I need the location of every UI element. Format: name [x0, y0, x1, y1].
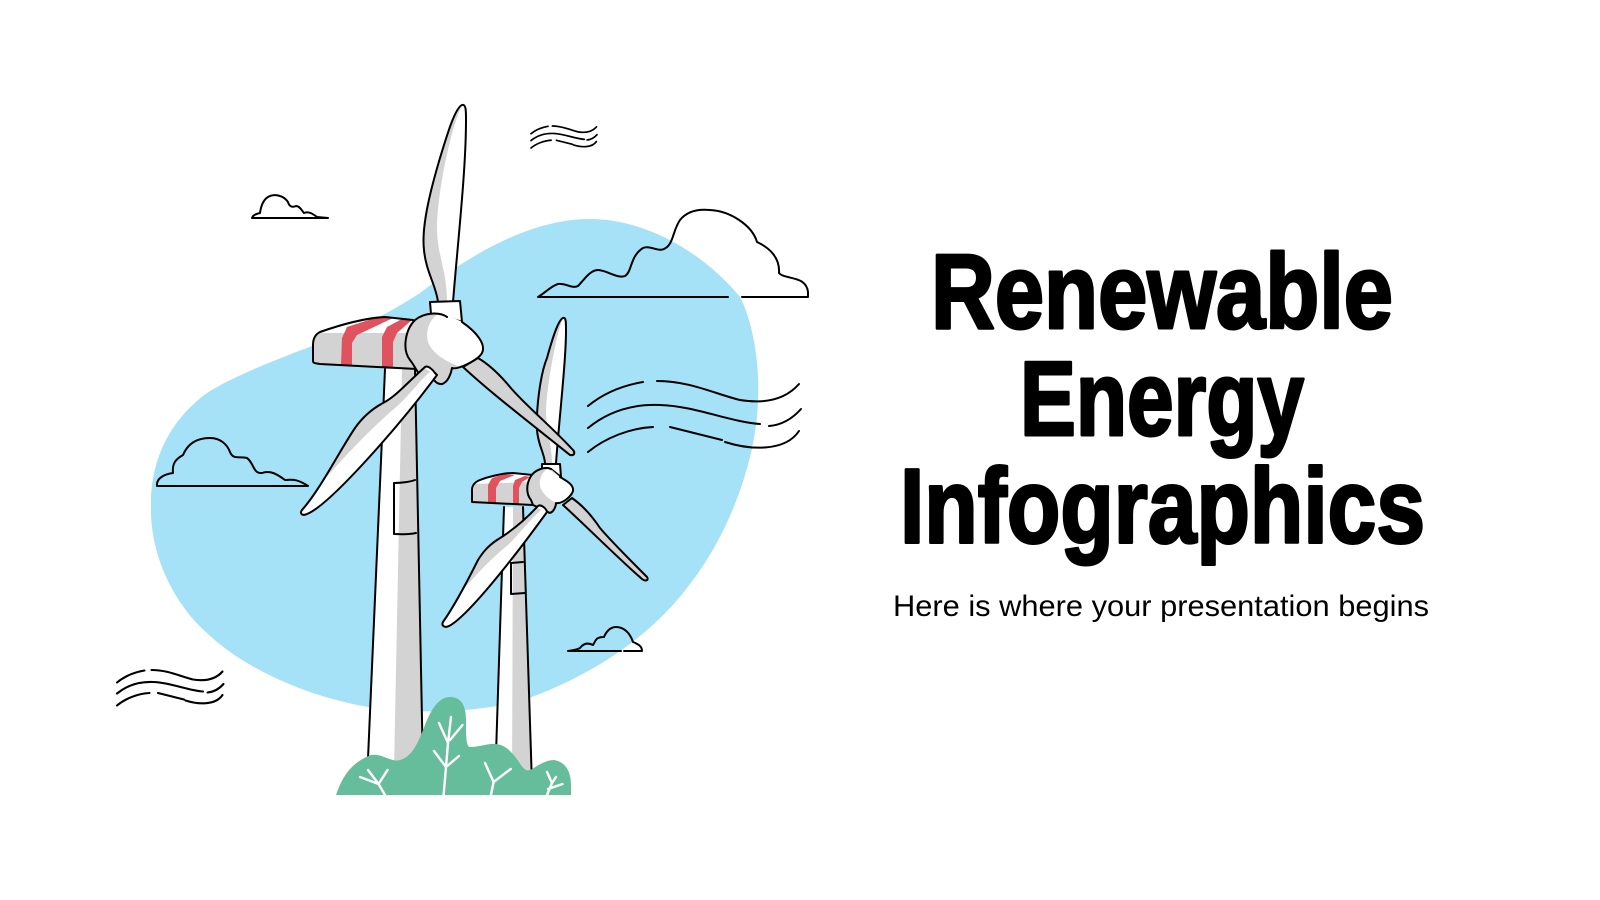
cloud: lower small — [568, 627, 642, 651]
large lower right blade — [463, 358, 574, 455]
small tower — [495, 507, 532, 785]
cloud: top small — [252, 195, 328, 218]
bush branches — [360, 717, 562, 795]
small lower left blade — [442, 506, 547, 627]
title: Infographics — [900, 448, 1425, 566]
large nacelle — [313, 317, 417, 369]
large wind turbine — [301, 105, 574, 770]
small lower right blade — [563, 498, 648, 580]
small top blade — [537, 318, 566, 463]
large top blade — [423, 105, 466, 302]
small hub — [527, 468, 573, 513]
small wind turbine — [442, 318, 648, 785]
title: Renewable — [931, 233, 1393, 351]
cloud: large upper right — [538, 210, 808, 297]
large hub — [405, 313, 483, 384]
small nacelle — [472, 473, 533, 505]
title: Energy — [1020, 340, 1304, 458]
large blade collar — [430, 301, 462, 322]
cloud: left — [157, 438, 308, 486]
green bush — [336, 697, 571, 795]
large lower left blade — [301, 367, 437, 515]
wind lines: lower left — [117, 670, 224, 706]
background blob — [151, 219, 758, 711]
wind lines: top — [531, 126, 597, 148]
large tower — [368, 369, 423, 770]
subtitle: Here is where your presentation begins — [893, 590, 1429, 623]
title — [900, 233, 1425, 566]
small blade collar — [542, 464, 561, 477]
wind lines: right — [588, 381, 801, 452]
